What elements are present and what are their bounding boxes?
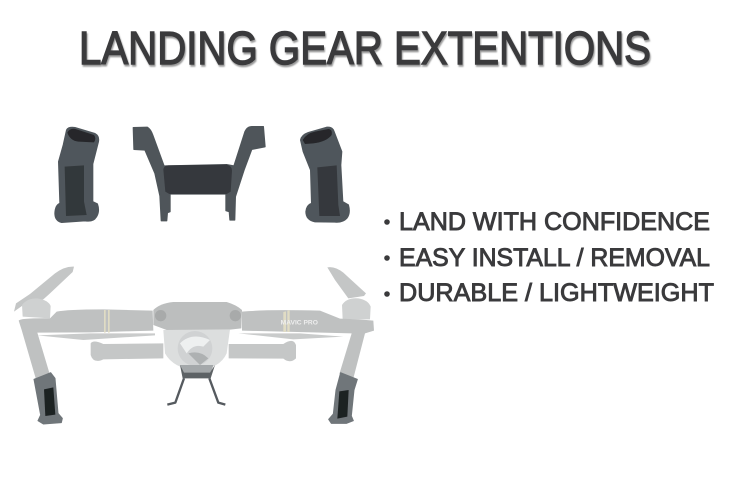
arm stripes	[104, 310, 110, 333]
title: LANDING GEAR EXTENTIONS	[80, 24, 652, 76]
title: LANDING GEAR EXTENTIONS	[79, 22, 651, 74]
feature: land with confidence: LAND WITH CONFIDENCE	[399, 208, 710, 236]
right fitted extension	[329, 373, 357, 423]
feature list	[384, 208, 714, 307]
thin rear props	[37, 333, 155, 340]
right propeller	[327, 267, 366, 298]
feature: durable / lightweight: DURABLE / LIGHTWEIGHT	[399, 279, 714, 307]
drone with extensions fitted	[14, 267, 374, 424]
left leg extension	[55, 127, 99, 222]
feature: easy install / removal: EASY INSTALL / REMOVAL	[399, 244, 710, 272]
right leg extension	[301, 127, 349, 222]
center landing bracket	[167, 378, 225, 405]
gimbal camera	[163, 329, 230, 371]
product photo: three landing gear parts	[55, 127, 349, 222]
left propeller	[14, 267, 74, 312]
rear arms	[91, 341, 163, 361]
center bracket	[133, 127, 265, 221]
motors	[22, 298, 51, 318]
body	[153, 302, 242, 330]
arms and legs	[19, 309, 153, 379]
Mavic Pro logo: MAVIC PRO	[281, 320, 318, 327]
left fitted extension	[34, 373, 62, 424]
